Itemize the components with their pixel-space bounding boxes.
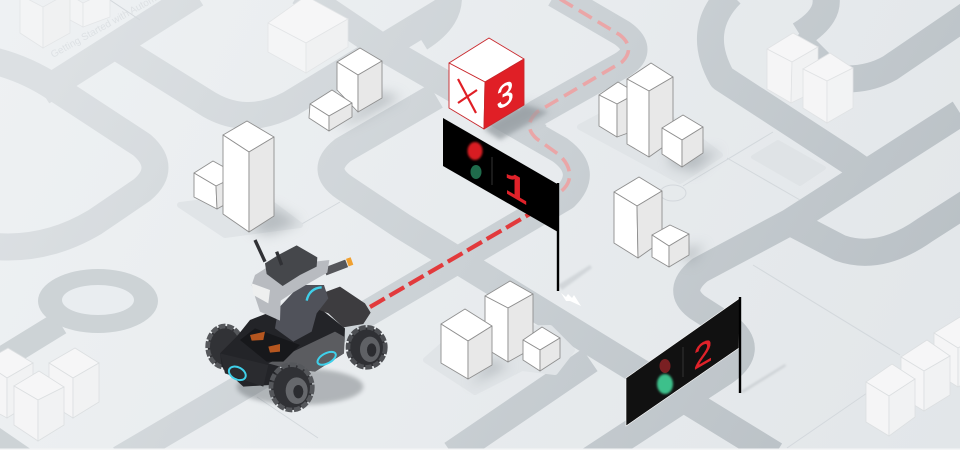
blaster barrel bbox=[325, 261, 352, 272]
robot bbox=[208, 240, 385, 410]
chassis bbox=[220, 308, 345, 387]
antennas bbox=[255, 240, 282, 265]
building pads bbox=[180, 95, 720, 392]
cube marker with X and 3 bbox=[449, 38, 548, 140]
right wheel bbox=[348, 327, 385, 367]
bottom edge bbox=[0, 448, 960, 450]
cyan lights bbox=[227, 287, 338, 383]
faded buildings top right bbox=[767, 33, 853, 123]
faded buildings bottom right bbox=[866, 317, 960, 436]
flag 2 with traffic light bbox=[626, 297, 786, 426]
building group top right bbox=[599, 63, 703, 167]
faded buildings bottom left bbox=[0, 348, 99, 441]
building shadows bbox=[250, 92, 720, 385]
head bbox=[252, 260, 329, 321]
building group left bbox=[194, 121, 274, 232]
bright route dashes bbox=[370, 211, 535, 307]
top module bbox=[265, 245, 317, 286]
flag 2 with traffic light: 2 bbox=[693, 331, 713, 382]
pale route road dashes bbox=[530, 0, 629, 195]
roundabout bbox=[0, 269, 158, 450]
faded buildings top left bbox=[20, 0, 110, 48]
flag 1 with traffic light bbox=[443, 118, 592, 306]
rear left wheel bbox=[208, 326, 242, 367]
camera bbox=[252, 283, 270, 303]
cube marker with X and 3: 3 bbox=[496, 73, 514, 122]
building group bottom centre bbox=[441, 281, 560, 379]
faded building top centre bbox=[268, 0, 348, 73]
flag 1 with traffic light: 1 bbox=[504, 163, 528, 217]
parking pad bbox=[753, 142, 824, 184]
gimbal arm bbox=[275, 285, 328, 342]
building group centre right bbox=[614, 177, 689, 267]
building group top centre bbox=[309, 48, 382, 131]
front wheel bbox=[271, 365, 312, 410]
rear deck bbox=[315, 287, 371, 327]
